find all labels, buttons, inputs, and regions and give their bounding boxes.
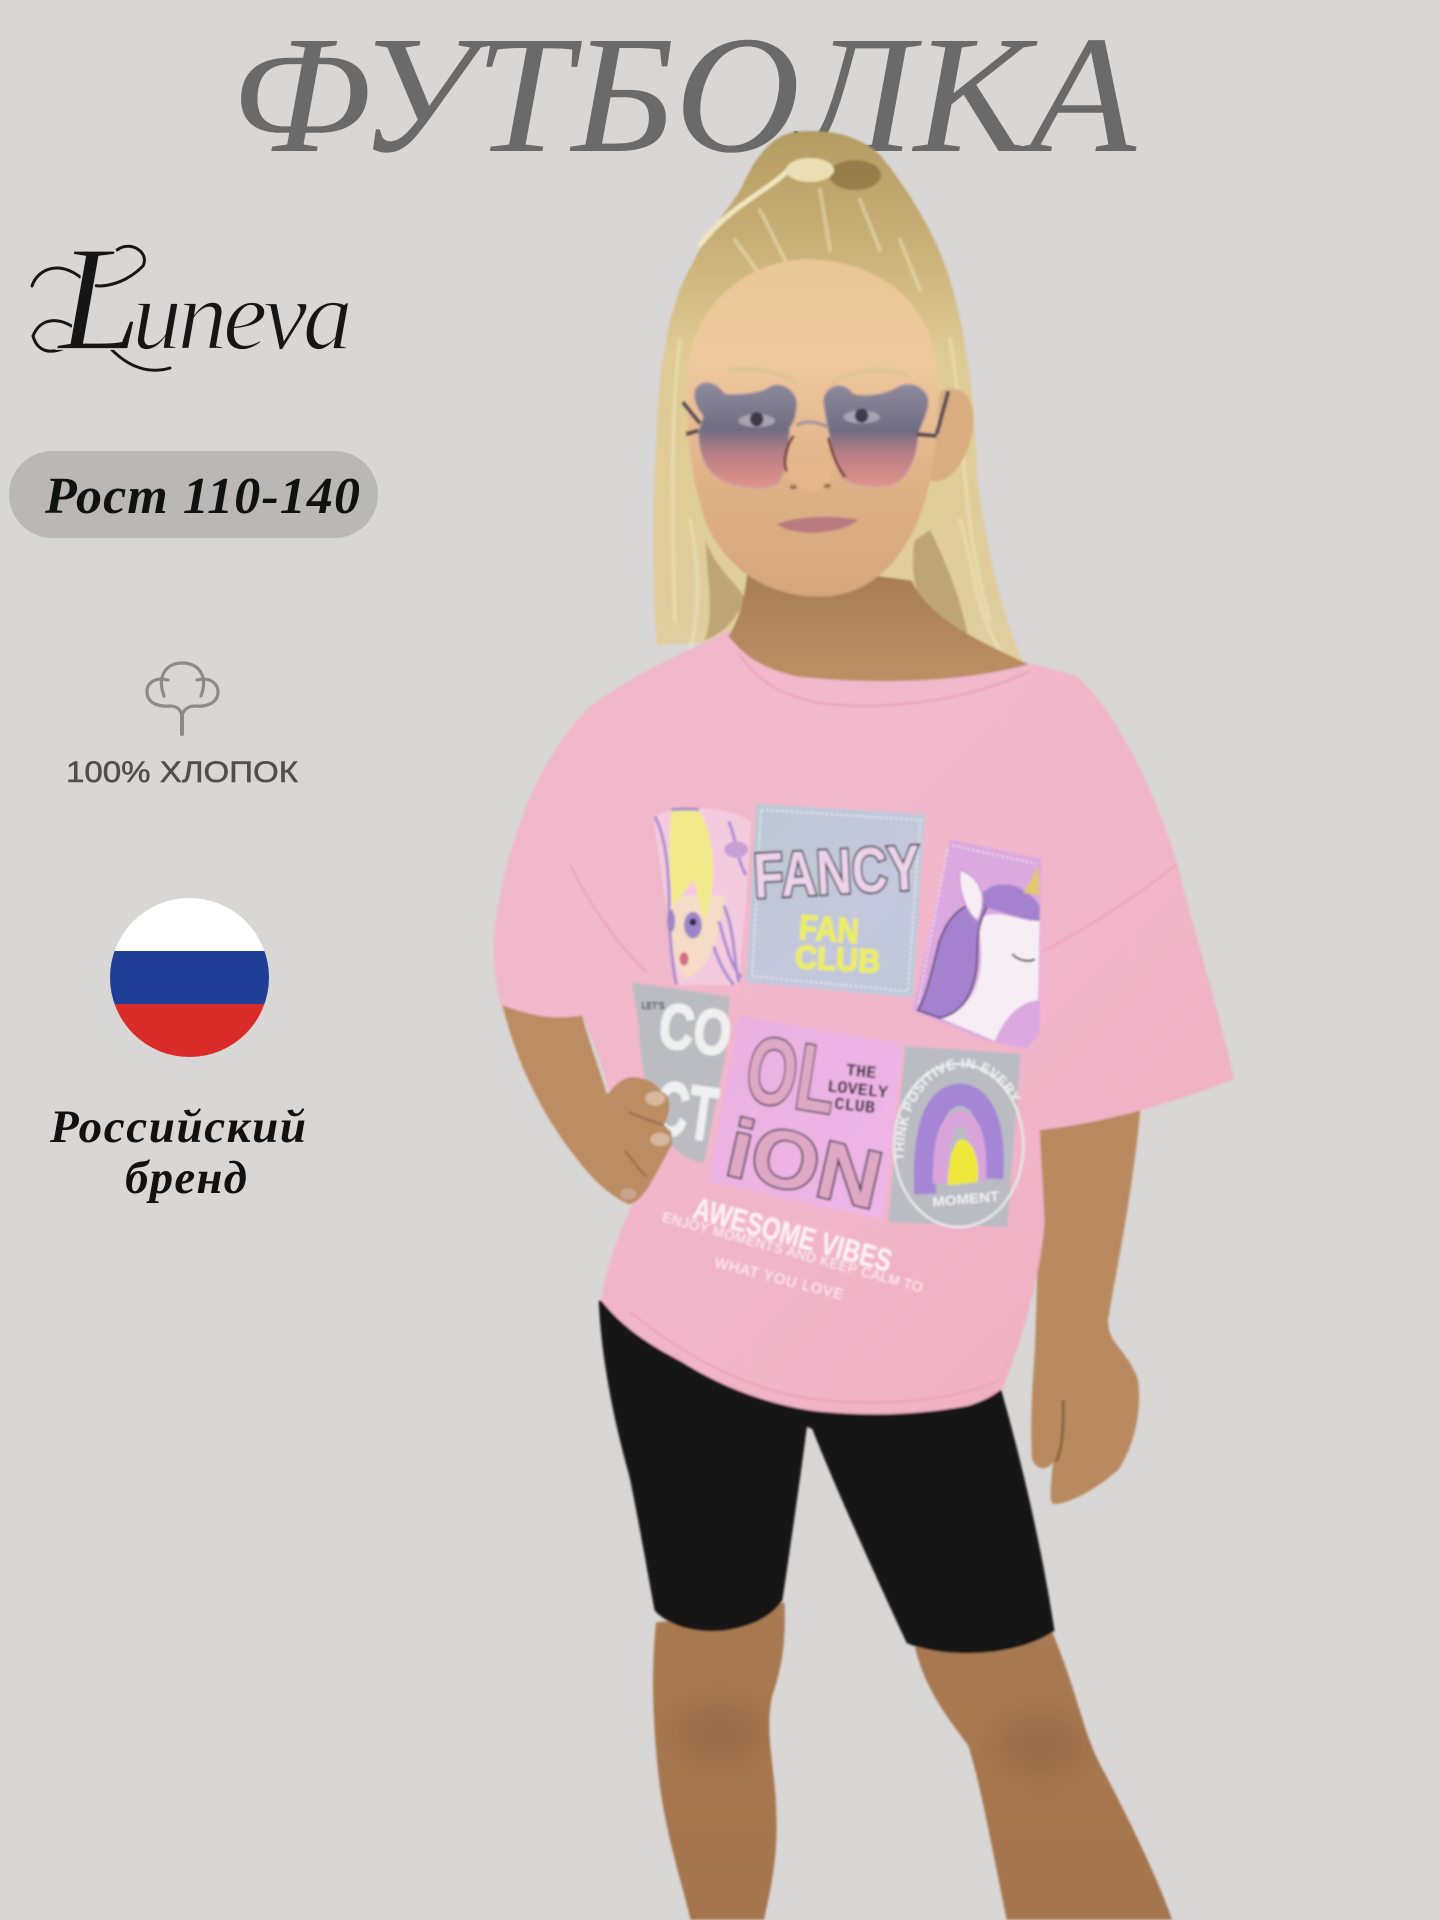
brand logo: Luneva: uneva: [132, 260, 350, 371]
print: unicorn patch: [913, 839, 1041, 1049]
print: gray cool patch: [632, 982, 736, 1163]
legs: [653, 1602, 1172, 1920]
print: cool tion patch: iON: [719, 1103, 890, 1227]
nose and mouth: [787, 463, 833, 491]
title: ФУТБОЛКА: [231, 2, 1137, 188]
print: fancy fan club patch: FAN: [798, 909, 860, 951]
print: awesome vibes slogan: AWESOME VIBES: [690, 1191, 896, 1279]
print: awesome vibes slogan: WHAT YOU LOVE: [713, 1255, 845, 1304]
brand origin label: Российский: [49, 1101, 306, 1153]
height badge: Рост 110-140: [44, 468, 360, 525]
print: cool tion patch: THE: [845, 1062, 877, 1084]
print: gray cool patch: LET'S: [642, 1001, 665, 1012]
print: anime girl: [654, 808, 751, 985]
print: awesome vibes slogan: ENJOY MOMENTS AND KEEP CALM TO: [661, 1209, 924, 1295]
brand logo: Luneva: L: [56, 216, 137, 382]
icon: russian flag: [110, 898, 269, 1057]
print: cool tion patch: CLUB: [833, 1096, 876, 1119]
shorts: [599, 1300, 1054, 1653]
photo: child model: [494, 129, 1234, 1920]
print: gray cool patch: CO: [655, 990, 736, 1070]
print: rainbow patch: MOMENT: [932, 1189, 1001, 1210]
hair: [653, 131, 1023, 690]
print: rainbow patch: [887, 1045, 1026, 1230]
print: cool tion patch: [709, 1015, 903, 1227]
sunglasses: [683, 382, 948, 488]
print: cool tion patch: LOVELY: [826, 1078, 889, 1104]
print: fancy fan club patch: FANCY: [752, 832, 922, 912]
right arm and hand: [1031, 1090, 1142, 1504]
material label: 100% ХЛОПОК: [66, 756, 299, 789]
brand logo: Luneva: [32, 216, 350, 382]
neck: [728, 559, 1028, 681]
left arm and hand on hip: [502, 1005, 672, 1204]
brand origin label: [49, 1101, 306, 1204]
print: cool tion patch: OL: [740, 1016, 844, 1134]
print: rainbow patch: THINK POSITIVE IN EVERY: [894, 1058, 1021, 1159]
height badge: [9, 451, 378, 538]
print: fancy fan club patch: CLUB: [794, 939, 881, 980]
brand origin label: бренд: [125, 1152, 247, 1204]
t-shirt: [494, 630, 1234, 1416]
face: [683, 259, 973, 597]
icon: cotton: [147, 663, 218, 734]
seams: [571, 653, 1176, 1402]
print: gray cool patch: CT: [649, 1066, 722, 1159]
print: fancy fan club patch: [746, 804, 925, 998]
